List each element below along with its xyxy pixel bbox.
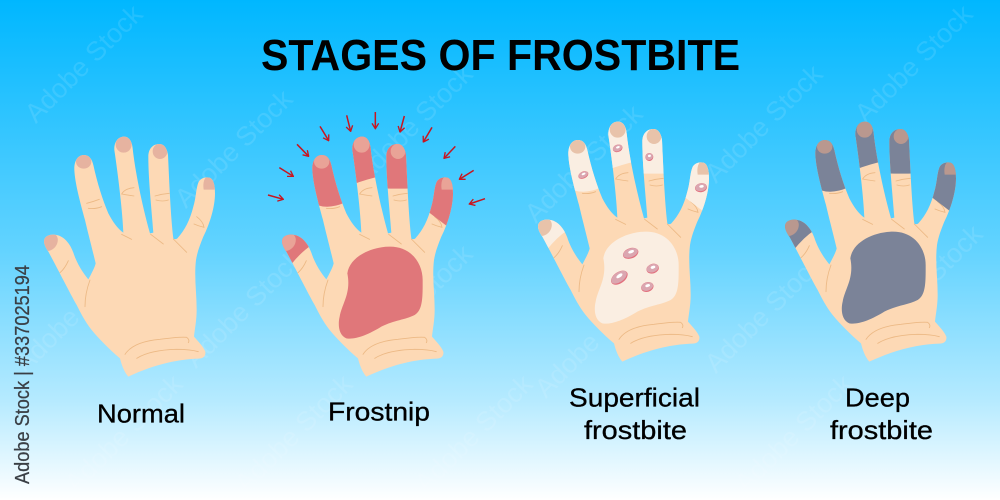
hand shape bbox=[282, 137, 453, 377]
cold arrows around frostnip hand bbox=[268, 112, 485, 204]
stock id vertical text: Adobe Stock | #337025194 bbox=[12, 265, 34, 484]
stock watermarks: Adobe Stock bbox=[519, 99, 649, 228]
stock watermarks: Adobe Stock bbox=[9, 249, 139, 378]
stock watermarks: Adobe Stock bbox=[349, 59, 479, 188]
fingernails bbox=[531, 121, 710, 239]
hand shape bbox=[785, 122, 956, 362]
label: deep frostbite: Deep bbox=[845, 382, 910, 412]
hand: normal bbox=[37, 136, 216, 377]
skin creases bbox=[801, 173, 945, 343]
title: STAGES OF FROSTBITE bbox=[261, 31, 740, 80]
pale affected patches bbox=[527, 115, 714, 324]
stock watermarks: Adobe Stock bbox=[179, 244, 309, 373]
stock watermarks: Adobe Stock bbox=[59, 369, 189, 498]
stock watermarks: Adobe Stock bbox=[859, 219, 989, 348]
stock watermarks: Adobe Stock bbox=[169, 84, 299, 213]
fingernails bbox=[778, 121, 957, 239]
skin creases bbox=[554, 173, 698, 343]
stock watermarks: Adobe Stock bbox=[849, 0, 979, 128]
skin creases bbox=[60, 188, 204, 358]
grey affected patches bbox=[774, 115, 961, 324]
label: normal: Normal bbox=[97, 398, 185, 428]
fingernails bbox=[275, 136, 454, 254]
label: superficial frostbite: Superficial bbox=[569, 382, 700, 412]
hand: superficial frostbite bbox=[527, 115, 714, 362]
stock watermarks: Adobe Stock bbox=[699, 249, 829, 378]
label: frostnip: Frostnip bbox=[328, 396, 430, 426]
label: superficial frostbite: frostbite bbox=[584, 415, 687, 445]
hand: frostnip bbox=[271, 130, 458, 377]
fingernails bbox=[37, 136, 216, 254]
stock watermarks: Adobe Stock bbox=[409, 369, 539, 498]
skin creases bbox=[298, 188, 442, 358]
label: superficial frostbite bbox=[569, 382, 700, 445]
stock watermarks: Adobe Stock bbox=[19, 0, 149, 128]
stock watermarks: Adobe Stock bbox=[529, 274, 659, 403]
stock watermarks: Adobe Stock bbox=[229, 369, 359, 498]
hand shape bbox=[538, 122, 709, 362]
blisters bbox=[577, 143, 708, 294]
label: deep frostbite: frostbite bbox=[830, 415, 933, 445]
red affected patches bbox=[271, 130, 458, 339]
hand shape bbox=[44, 137, 215, 377]
stock watermarks: Adobe Stock bbox=[349, 239, 479, 368]
stock watermarks: Adobe Stock bbox=[729, 369, 859, 498]
label: deep frostbite bbox=[830, 382, 933, 445]
stock watermarks: Adobe Stock bbox=[699, 59, 829, 188]
hand: deep frostbite bbox=[774, 115, 961, 362]
